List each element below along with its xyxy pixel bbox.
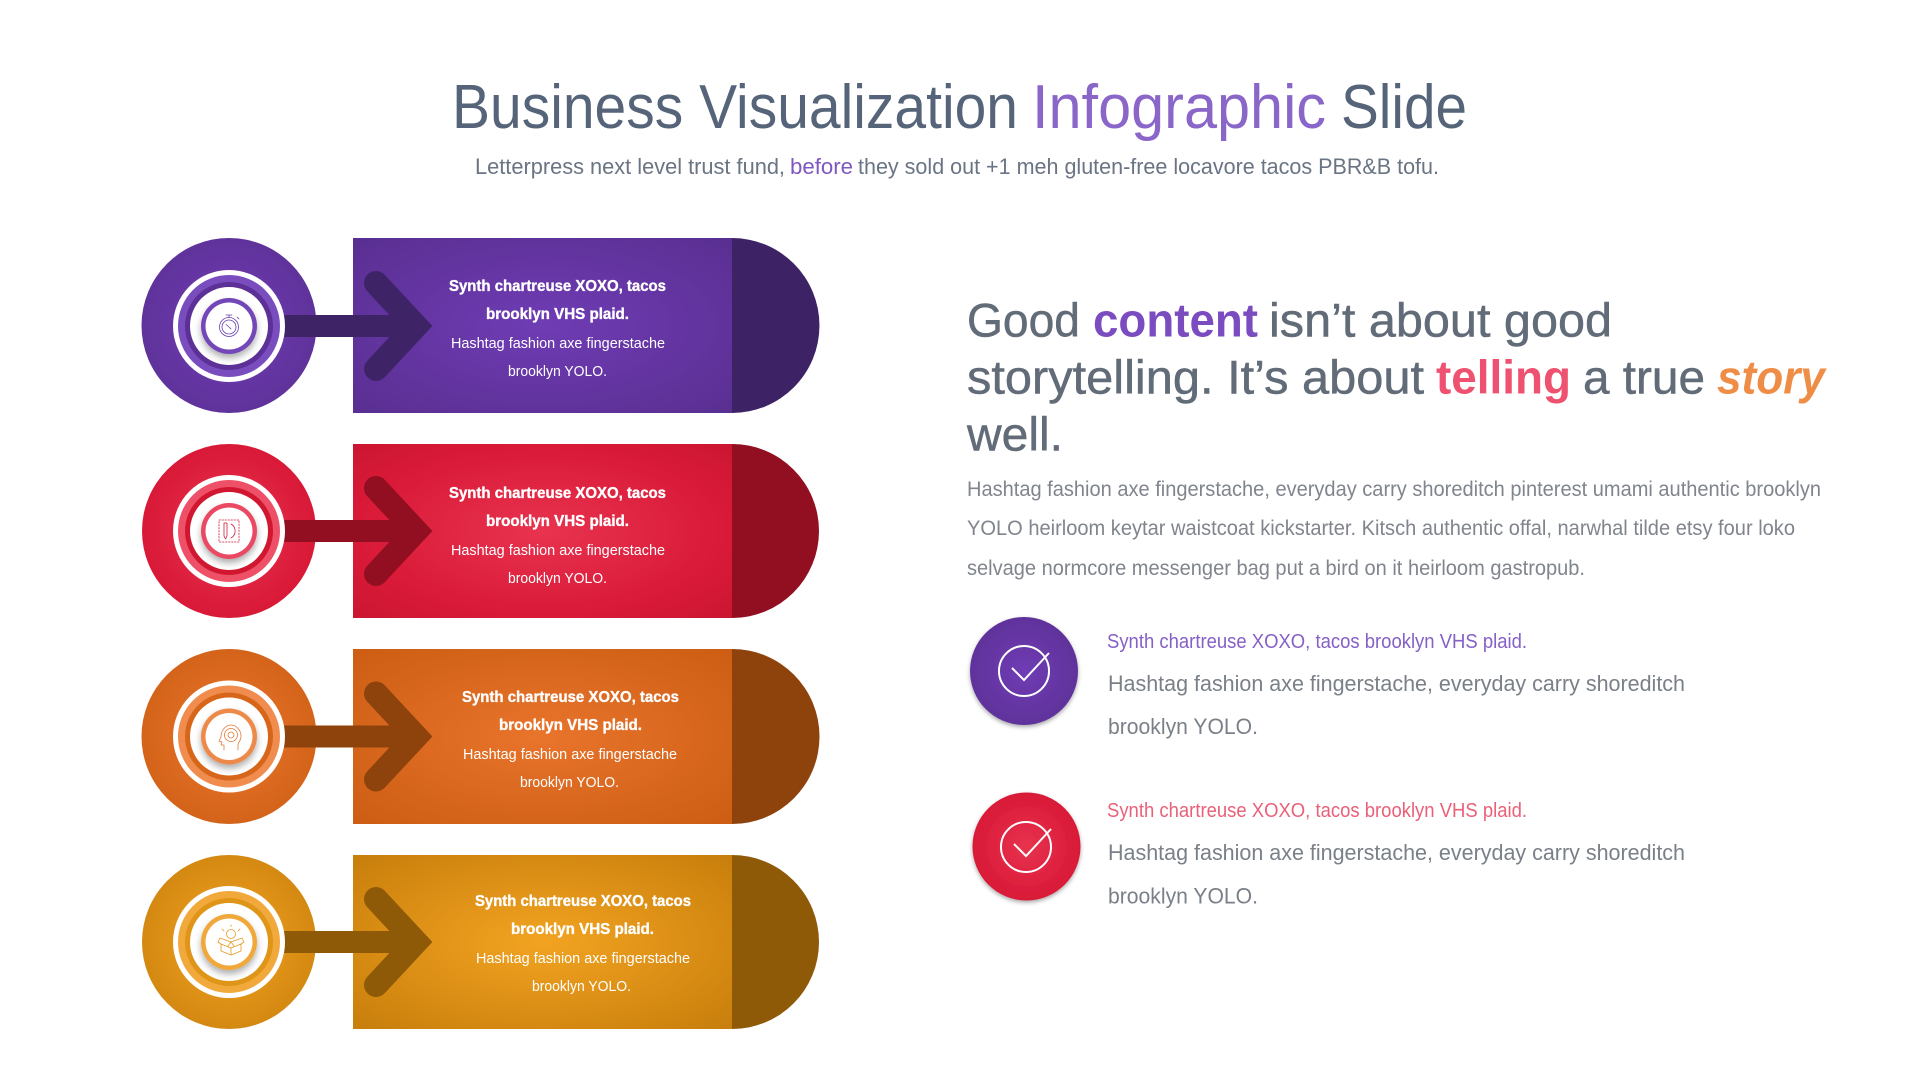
purple banner [353,238,819,413]
purple concentric rings [176,272,282,380]
amber banner text: brooklyn YOLO. [532,978,631,995]
list item: purple: Hashtag fashion axe fingerstache, everyday carry shoreditch [1108,671,1685,696]
icon: red check badge [972,792,1080,900]
list item: purple: Synth chartreuse XOXO, tacos brooklyn VHS plaid. [1107,631,1527,653]
orange banner text [462,689,679,791]
purple outer circle [142,238,316,413]
purple banner text: Synth chartreuse XOXO, tacos [449,278,666,295]
paragraph: Hashtag fashion axe fingerstache, everyday carry shoreditch pinterest umami authentic brooklyn [967,478,1821,501]
amber banner text: Synth chartreuse XOXO, tacos [475,893,691,910]
list item: red: brooklyn YOLO. [1108,884,1258,908]
list item: purple: brooklyn YOLO. [1108,714,1258,739]
list item: red [1107,800,1685,908]
red outer circle [142,444,316,618]
red banner text: Synth chartreuse XOXO, tacos [449,485,666,502]
amber banner [353,855,819,1029]
paragraph: YOLO heirloom keytar waistcoat kickstarter. Kitsch authentic offal, narwhal tilde etsy four loko [967,517,1795,540]
purple arrow [284,283,416,369]
list item: purple [1107,631,1685,739]
subtitle: before [790,154,853,179]
heading: good content: isn’t about good [1269,294,1612,346]
icon: box with light bulb [218,925,244,955]
red concentric rings [176,478,282,584]
heading: good content: content [1093,294,1258,346]
heading: good content [966,294,1828,460]
amber arrow [284,899,416,985]
heading: good content: telling [1436,350,1571,404]
orange banner [353,649,820,824]
heading: good content: a true [1583,350,1705,404]
orange outer circle [142,649,316,824]
red banner text [449,485,666,587]
icon: purple check badge [970,617,1078,725]
panel: amber row [142,855,819,1029]
amber banner text: brooklyn VHS plaid. [511,921,654,938]
title: Business Visualization [452,73,1018,142]
panel: orange row [142,649,820,824]
list item: red: Synth chartreuse XOXO, tacos brooklyn VHS plaid. [1107,800,1527,822]
list item: red: Hashtag fashion axe fingerstache, everyday carry shoreditch [1108,840,1685,865]
amber banner text [475,893,691,995]
heading: good content: well. [966,408,1063,460]
title: Slide [1341,73,1467,142]
icon: stopwatch [220,315,239,336]
purple banner text: Hashtag fashion axe fingerstache [451,335,665,352]
purple banner text: brooklyn YOLO. [508,363,607,380]
title [452,73,1467,142]
orange banner text: brooklyn YOLO. [520,774,619,791]
panel: purple row [142,238,819,413]
purple banner text: brooklyn VHS plaid. [486,306,629,323]
paragraph: selvage normcore messenger bag put a bird on it heirloom gastropub. [967,557,1585,580]
amber concentric rings [176,888,282,996]
icon: pencil and gear [219,520,239,542]
heading: good content: Good [967,294,1080,346]
subtitle [475,154,1439,179]
heading: good content: storytelling. It’s about [967,350,1424,404]
orange banner text: brooklyn VHS plaid. [499,717,642,734]
heading: good content: story [1717,350,1828,404]
red banner text: Hashtag fashion axe fingerstache [451,542,665,559]
purple banner text [449,278,666,380]
subtitle: Letterpress next level trust fund, [475,154,785,179]
amber outer circle [142,855,316,1029]
red banner [353,444,819,618]
icon: head with maze [219,725,241,750]
panel: red row [142,444,819,618]
paragraph [967,478,1821,580]
orange banner text: Hashtag fashion axe fingerstache [463,746,677,763]
title: Infographic [1032,73,1326,142]
red arrow [284,488,416,574]
amber banner text: Hashtag fashion axe fingerstache [476,950,690,967]
subtitle: they sold out +1 meh gluten-free locavore tacos PBR&B tofu. [858,154,1439,179]
orange concentric rings [176,683,282,790]
orange arrow [284,694,416,780]
red banner text: brooklyn VHS plaid. [486,513,629,530]
orange banner text: Synth chartreuse XOXO, tacos [462,689,679,706]
red banner text: brooklyn YOLO. [508,570,607,587]
